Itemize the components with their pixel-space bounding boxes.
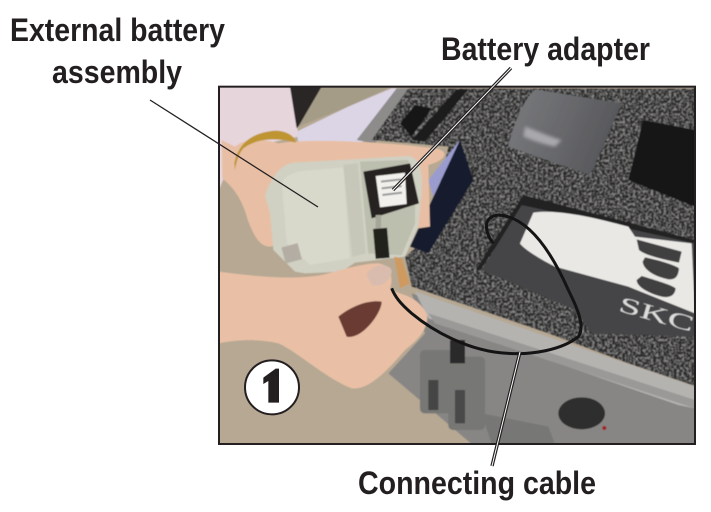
- battery adapter box: [363, 163, 419, 218]
- grey case lower body: [388, 293, 695, 444]
- device brand text: SKC: [616, 291, 697, 337]
- heading: External battery assembly: assembly: [52, 54, 182, 90]
- case round port: [558, 397, 605, 429]
- right pocket: [628, 120, 695, 207]
- number badge: 1: [245, 360, 299, 414]
- index finger: [394, 257, 410, 288]
- leader line: Connecting cable: [492, 352, 520, 466]
- dark navy card: [410, 140, 473, 253]
- leader line: External battery assembly: [150, 100, 318, 207]
- grey cylinder: [508, 89, 622, 175]
- battery assembly lid: [265, 156, 422, 273]
- hinge: [343, 163, 366, 257]
- heading: External battery assembly: External battery: [10, 12, 225, 48]
- paper and sleeve: [219, 87, 298, 190]
- device pocket shadow: [477, 195, 695, 271]
- heading: Battery adapter: Battery adapter: [441, 31, 650, 67]
- leader line: Battery adapter: [393, 68, 511, 190]
- bracelet: [234, 131, 296, 170]
- top left pocket: [400, 105, 432, 137]
- photo panel: [219, 87, 697, 444]
- lower hand: [219, 263, 427, 388]
- heading: External battery assembly: [10, 12, 225, 90]
- device keys: [637, 239, 682, 263]
- photo frame: [219, 87, 695, 444]
- shadow between fingers: [338, 301, 382, 337]
- grey case rim: [357, 88, 412, 143]
- table background: [219, 87, 695, 444]
- device white panel: [520, 212, 695, 313]
- leader line inner: Battery adapter: [393, 68, 511, 190]
- connecting cable: [392, 215, 581, 354]
- upper hand holding assembly: [222, 140, 444, 247]
- case latch: [420, 350, 555, 444]
- device lower dark section: [582, 293, 695, 337]
- device body: [482, 205, 695, 337]
- connector plug: [376, 215, 381, 232]
- inner compartment: [360, 160, 415, 255]
- leader line inner: Connecting cable: [492, 352, 520, 466]
- foam insert: [372, 88, 695, 386]
- heading: Connecting cable: Connecting cable: [358, 465, 596, 501]
- thumb nail: [367, 265, 392, 286]
